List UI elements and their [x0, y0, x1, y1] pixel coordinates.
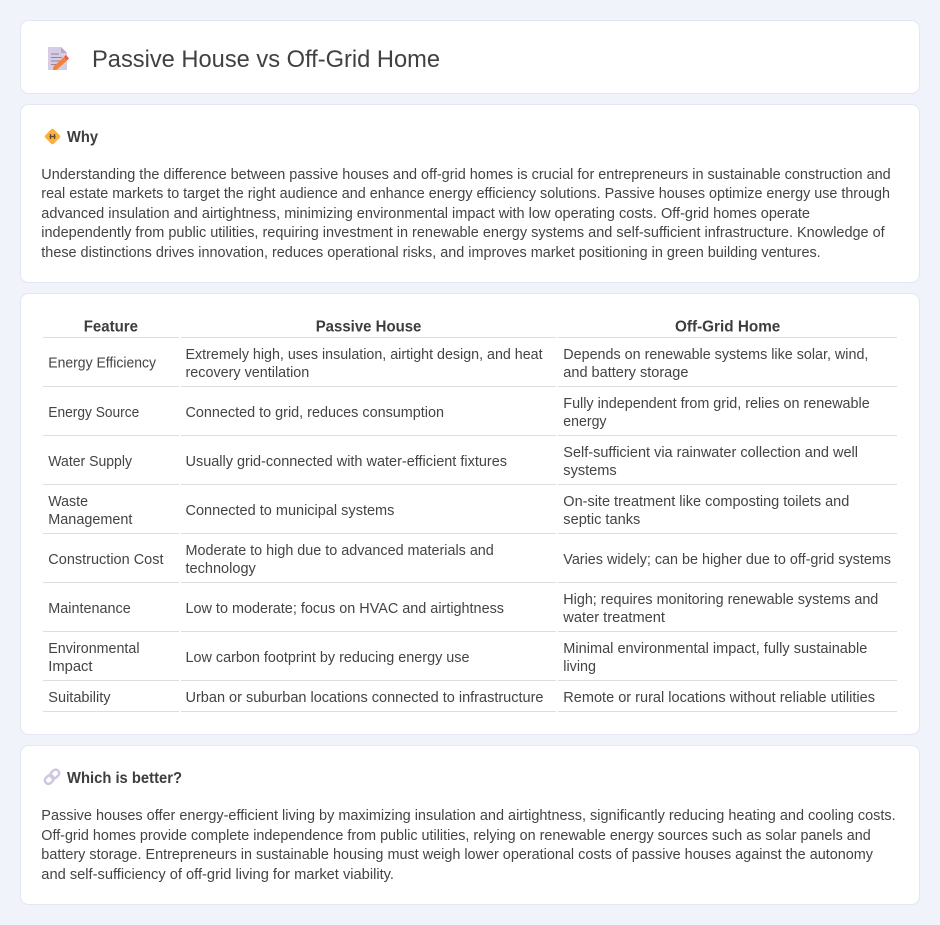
text block: which is better paragraph: battery storage. Entrepreneurs in sustainable housing must weigh lower operational costs of passive houses against the autonomy — [41, 847, 874, 863]
icon: diamond warning sign — [44, 128, 61, 145]
table row: maintenance: High; requires monitoring renewable systems and — [563, 592, 878, 608]
text block: why paragraph: independently from public utilities, requiring investment in renewable energy systems and self-sufficient infrastructure. Knowledge of — [41, 225, 886, 241]
text block: which is better paragraph: Passive houses offer energy-efficient living by maximizing insulation and airtightness, significantly reducing heating and cooling costs. — [41, 808, 896, 824]
table row: maintenance: Low to moderate; focus on HVAC and airtightness — [186, 601, 504, 617]
table row: construction cost — [43, 543, 897, 583]
table row: construction cost: Varies widely; can be higher due to off-grid systems — [563, 552, 891, 568]
icon: document with pencil — [48, 47, 69, 70]
table row: suitability — [43, 690, 897, 712]
table row: construction cost: Moderate to high due to advanced materials and — [186, 543, 494, 559]
table row: environmental impact: Minimal environmental impact, fully sustainable — [563, 641, 867, 657]
table row: energy efficiency: Energy Efficiency — [48, 356, 157, 372]
text block: why paragraph: Understanding the difference between passive houses and off-grid homes is crucial for entrepreneurs in sustainable construction and — [41, 167, 891, 183]
table row: waste management: On-site treatment like composting toilets and — [563, 494, 849, 510]
table row: waste management — [43, 494, 897, 534]
table row: energy efficiency: Extremely high, uses insulation, airtight design, and heat — [186, 347, 543, 363]
table row: environmental impact — [43, 641, 897, 681]
table row: energy efficiency: recovery ventilation — [186, 365, 309, 381]
table row: energy efficiency — [43, 347, 897, 387]
table row: energy source: energy — [563, 414, 607, 430]
table row: waste management: Connected to municipal systems — [186, 503, 394, 519]
table row: water supply — [43, 445, 897, 485]
table row: water supply: Usually grid-connected with water-efficient fixtures — [186, 454, 507, 470]
table row: environmental impact: Low carbon footprint by reducing energy use — [186, 650, 470, 666]
text block: why paragraph — [41, 167, 891, 261]
table row: water supply: systems — [563, 463, 617, 479]
text block: why paragraph: advanced insulation and airtightness, minimizing environmental impact with low operating costs. Off-grid homes operate — [41, 206, 810, 222]
table row: suitability: Suitability — [48, 690, 111, 706]
table row: waste management: Waste — [48, 494, 88, 510]
table row: construction cost: technology — [186, 561, 257, 577]
text block: which is better paragraph — [41, 808, 896, 883]
panel: comparison table — [20, 294, 920, 734]
table row: energy efficiency: Depends on renewable systems like solar, wind, — [563, 347, 868, 363]
text block: which is better paragraph: Off-grid homes provide complete independence from public utilities, relying on renewable energy sources such as solar panels and — [41, 828, 871, 844]
table row: energy source: Connected to grid, reduces consumption — [186, 405, 444, 421]
table row: environmental impact: Environmental — [48, 641, 139, 657]
panel: which is better — [20, 746, 920, 904]
table row: energy source: Energy Source — [48, 405, 139, 421]
table row: environmental impact: Impact — [48, 659, 93, 675]
table header row: Passive House — [316, 318, 421, 336]
table header row: Off-Grid Home — [675, 318, 780, 336]
table row: maintenance: Maintenance — [48, 601, 131, 617]
table row: energy source — [43, 396, 897, 436]
icon: link chain — [43, 768, 61, 785]
table row: maintenance: water treatment — [562, 610, 665, 626]
table row: suitability: Remote or rural locations without reliable utilities — [563, 690, 875, 706]
table row: maintenance — [43, 592, 897, 632]
table row: waste management: septic tanks — [563, 512, 640, 528]
panel: header — [20, 20, 920, 94]
table row: suitability: Urban or suburban locations connected to infrastructure — [186, 690, 544, 706]
heading: why: Why — [67, 129, 98, 146]
text block: why paragraph: real estate markets to target the right audience and enhance energy efficiency solutions. Passive houses optimize energy use through — [41, 186, 890, 202]
title: Passive House vs Off-Grid Home — [92, 46, 440, 73]
panel: why — [20, 104, 920, 282]
table header row: Feature — [84, 318, 138, 336]
text block: which is better paragraph: and self-sufficiency of off-grid living for market viability. — [41, 867, 394, 883]
table row: water supply: Water Supply — [48, 454, 133, 470]
table row: water supply: Self-sufficient via rainwater collection and well — [563, 445, 858, 461]
table row: construction cost: Construction Cost — [48, 552, 164, 568]
table header row — [43, 318, 897, 338]
table row: energy efficiency: and battery storage — [563, 365, 688, 381]
table row: environmental impact: living — [563, 659, 596, 675]
table row: waste management: Management — [48, 512, 132, 528]
text block: why paragraph: these distinctions drives innovation, reduces operational risks, and improves market positioning in green building ventures. — [41, 245, 821, 261]
table row: energy source: Fully independent from grid, relies on renewable — [563, 396, 870, 412]
heading: which is better: Which is better? — [67, 770, 182, 787]
